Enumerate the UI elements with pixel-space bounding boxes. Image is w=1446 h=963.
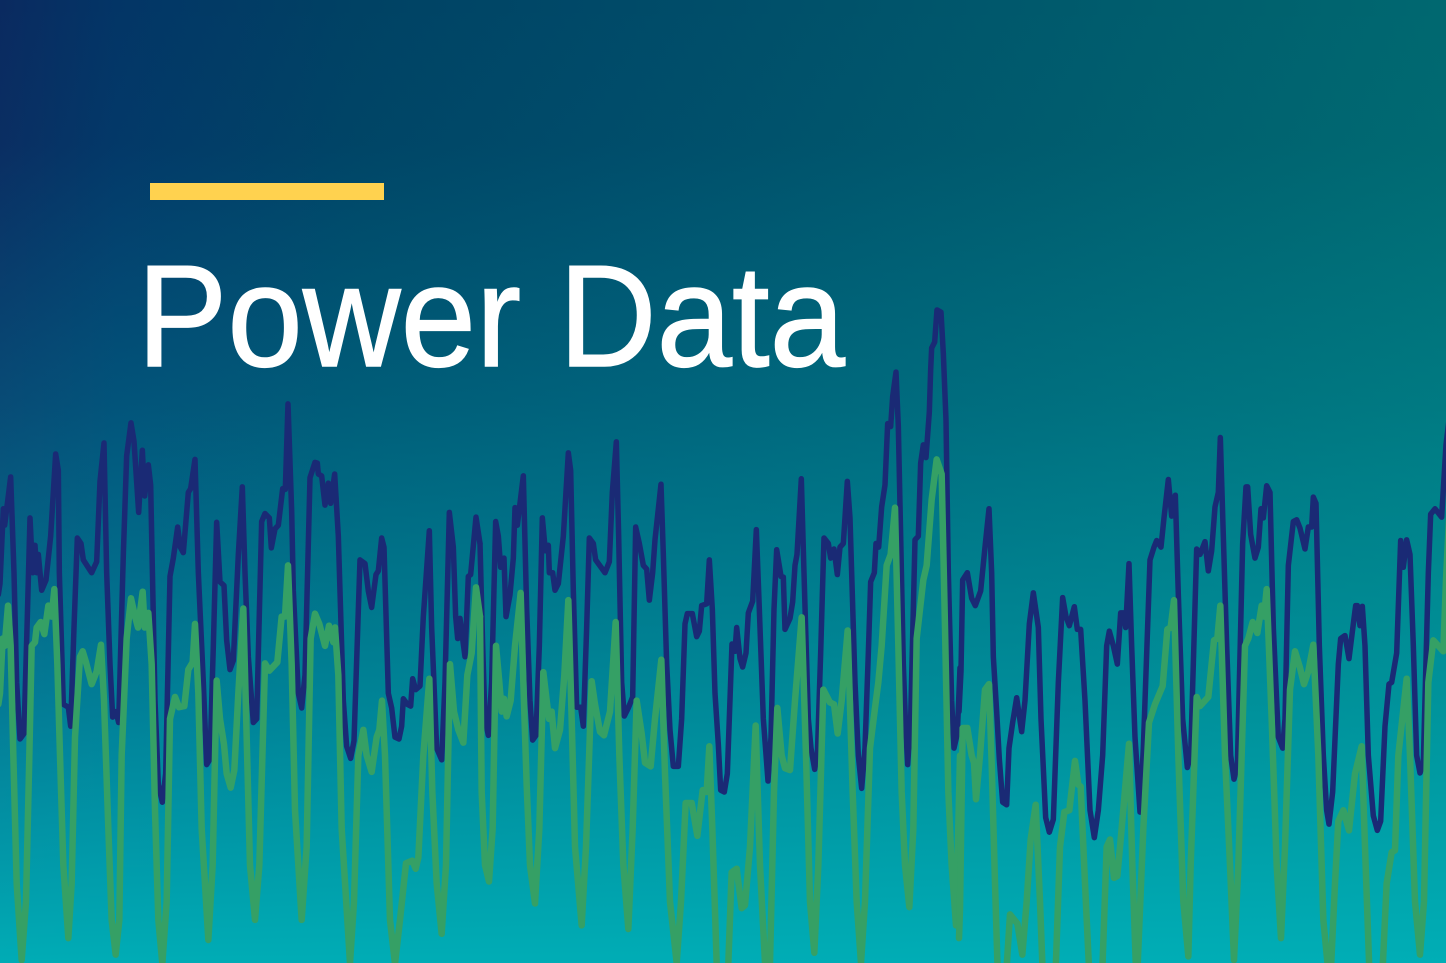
title: Power Data — [137, 235, 845, 397]
line chart: green series — [0, 459, 1446, 963]
line chart: navy series — [0, 310, 1446, 838]
accent bar — [150, 183, 384, 200]
